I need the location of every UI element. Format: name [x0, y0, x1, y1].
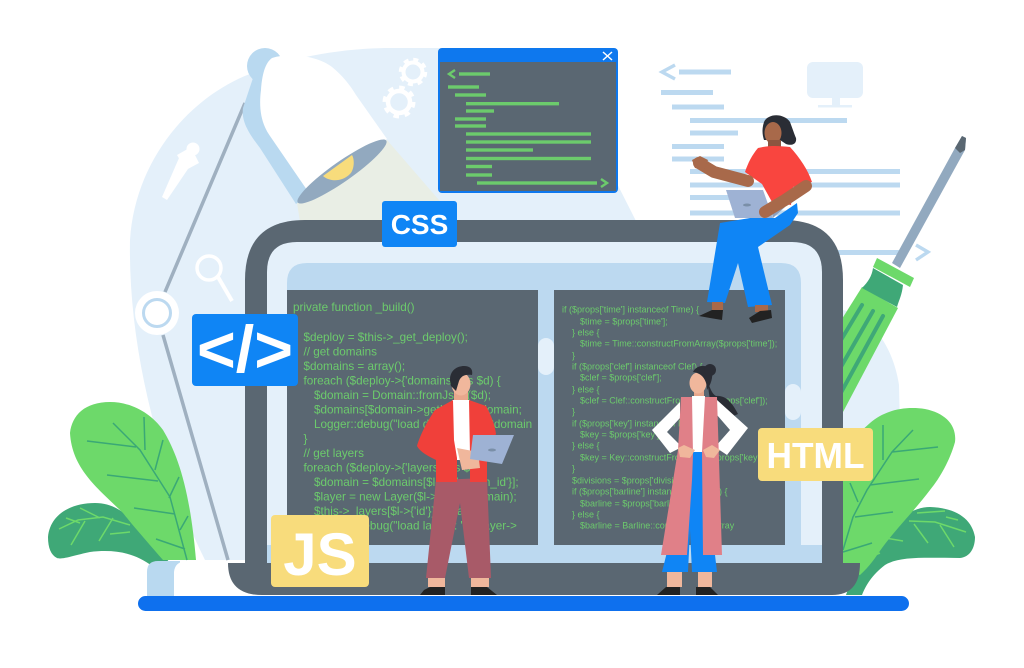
code panel: left	[287, 290, 538, 545]
icon: magnifier	[197, 256, 232, 301]
code panel: right: $key = Key::constructFromArray($props['key']);	[580, 452, 767, 462]
code panel: left: $layer = new Layer($l->{'id'}, $domain);	[314, 490, 517, 504]
code window	[438, 48, 618, 193]
tag: HTML: HTML	[766, 435, 864, 476]
screwdriver	[835, 136, 966, 412]
code panel: right: $time = $props['time'];	[580, 316, 668, 326]
person: woman with vest	[652, 364, 748, 595]
code panel: left: // get layers	[304, 447, 364, 460]
code panel: left: // get domains	[304, 346, 377, 358]
code panel: right: $barline = Barline::constructFromArray	[580, 520, 735, 530]
code panel: right: }	[572, 350, 575, 360]
code panel: left: $deploy = $this->_get_deploy();	[304, 331, 468, 344]
code panel: right: } else {	[572, 510, 600, 520]
code panel: left: private function _build()	[293, 301, 415, 314]
leaf: right large	[835, 408, 955, 575]
code panel: right: $clef = Clef::constructFromArray($props['clef']);	[580, 396, 768, 406]
icon: pipette	[162, 142, 200, 200]
code panel: left: }	[304, 432, 308, 446]
code panel: right: if ($props['key'] instanceof Key) {	[572, 418, 702, 428]
code panel: right: $time = Time::constructFromArray($props['time']);	[580, 338, 777, 348]
code panel: right: if ($props['time'] instanceof Time) {	[562, 304, 699, 314]
code panel: left: Logger::debug("load domains: " . $domain	[314, 418, 532, 431]
code panel: left: foreach ($deploy->{'domains'} as $d) {	[304, 374, 501, 388]
tag: code brackets: </>	[197, 312, 293, 386]
background blob	[130, 48, 900, 560]
code panel: right: $divisions = $props['divisions'];	[572, 476, 695, 486]
code panel: right: } else {	[572, 384, 600, 394]
code panel: right: if ($props['barline'] instanceof Barline) {	[572, 486, 728, 496]
leaf: right small	[846, 507, 975, 595]
code panel: left: $domain = $domains[$l->{'domain_id'}];	[314, 476, 519, 489]
code panel: left: $domains[$domain->getId()] = $domain;	[314, 404, 522, 416]
tag: CSS	[382, 201, 457, 247]
code panel: right: $barline = $props['barline'];	[580, 498, 688, 508]
background code lines	[661, 65, 928, 260]
code panel: right: } else {	[572, 440, 600, 450]
code panel: right	[554, 290, 785, 545]
person: man with laptop	[417, 366, 514, 595]
code panel: left: $domain = Domain::fromJson($d);	[314, 389, 491, 402]
icon: monitor	[807, 62, 863, 108]
code panel: right: $key = $props['key'];	[580, 430, 662, 440]
person: woman sitting with laptop	[692, 115, 812, 323]
code panel: left: foreach ($deploy->{'layers'} as $l) {	[304, 462, 484, 474]
tag: HTML	[758, 428, 873, 481]
lamp	[135, 48, 392, 560]
tag: JS: JS	[283, 521, 357, 588]
laptop	[228, 220, 860, 595]
code panel: right: $clef = $props['clef'];	[580, 372, 662, 382]
leaf: left small	[48, 496, 172, 566]
tag: JS	[271, 515, 369, 588]
code panel: right: }	[572, 464, 575, 474]
code panel: left: $domains = array();	[304, 360, 405, 373]
lamp base	[147, 561, 300, 597]
floor bar	[138, 596, 909, 611]
code panel: left: Logger::debug("load layers: " . $layer->	[314, 520, 517, 532]
lamp light cone	[297, 140, 458, 222]
leaf: left large	[70, 402, 196, 560]
code panel: left: $this->_layers[$l->{'id'}] = $layer;	[314, 505, 483, 518]
code panel: right: } else {	[572, 328, 600, 338]
tag: CSS: CSS	[391, 209, 448, 240]
code panel: right: }	[572, 406, 575, 416]
code panel: right: if ($props['clef'] instanceof Clef) {	[572, 362, 702, 372]
icon: gears	[384, 60, 426, 116]
